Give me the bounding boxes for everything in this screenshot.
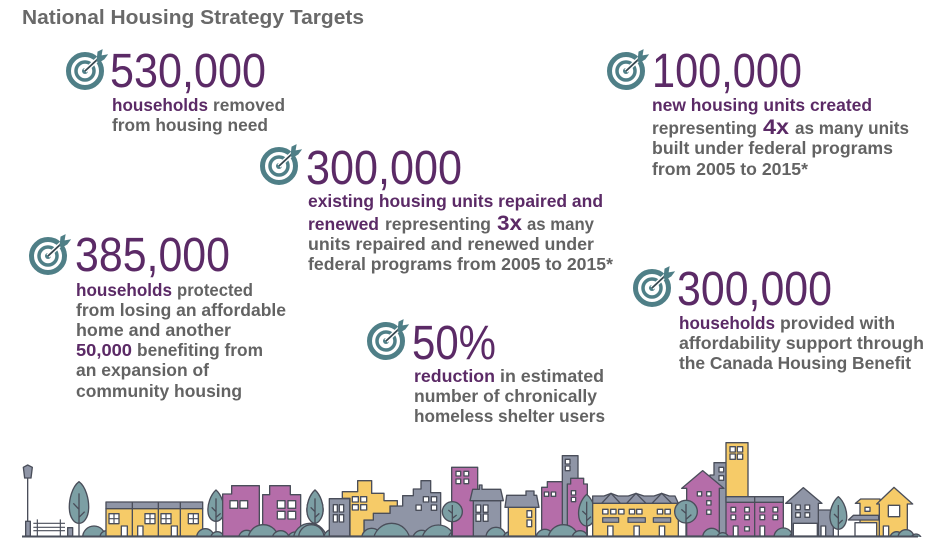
number: 100,000: 100,000 [652, 45, 802, 98]
round tree [675, 500, 697, 536]
description: protected households: benefiting from [137, 340, 263, 360]
ground line [22, 536, 918, 538]
row townhouses [593, 493, 678, 536]
number: 300,000: 300,000 [306, 142, 462, 195]
number: 300,000: 300,000 [677, 263, 832, 316]
description: affordability support: the Canada Housing Benefit [679, 353, 911, 373]
target: 100,000 new units [610, 45, 909, 179]
yellow house [505, 491, 539, 536]
description: affordability support: provided with [780, 313, 895, 333]
purple house [682, 471, 724, 536]
icon: target [610, 50, 648, 88]
icon: target [636, 267, 674, 304]
grey low building [329, 499, 350, 536]
bench [33, 519, 65, 536]
target: 300,000 households [636, 263, 924, 373]
description: repaired units: units repaired and renewed under [308, 234, 594, 254]
tree [307, 490, 323, 536]
description: protected households: 50,000 [76, 340, 132, 360]
yellow stepped building [342, 481, 397, 536]
description: protected households: community housing [76, 381, 242, 401]
row houses [106, 502, 203, 536]
bushes [83, 526, 113, 542]
description: affordability support: affordability support through [679, 333, 924, 353]
description: protected households: from losing an affordable [76, 300, 286, 320]
description: protected households: protected [177, 280, 253, 300]
icon: target [370, 320, 408, 358]
purple buildings [223, 486, 301, 536]
title: National Housing Strategy Targets [22, 7, 364, 29]
description: homelessness reduction: number of chronically [414, 386, 597, 406]
bushes [362, 523, 465, 542]
description: affordability support: households [679, 313, 775, 333]
description: repaired units: existing housing units repaired and [308, 191, 603, 211]
illustration: city skyline [0, 443, 928, 542]
bushes [486, 527, 517, 542]
bushes [197, 529, 224, 542]
description: protected households: an expansion of [76, 360, 209, 380]
yellow tower [726, 443, 748, 498]
yellow house [848, 487, 913, 536]
description: protected households: home and another [76, 320, 231, 340]
skyline middle section [299, 456, 595, 542]
description: homelessness reduction: in estimated [500, 366, 604, 386]
purple apartment block [726, 497, 783, 536]
description: 530,000: from housing need [112, 115, 268, 135]
tree [579, 494, 595, 536]
tree [208, 490, 224, 536]
number: 530,000: 530,000 [110, 45, 266, 98]
target: 385,000 households [32, 229, 286, 401]
number: 385,000: 385,000 [75, 229, 230, 282]
description: new units: built under federal programs [652, 138, 893, 158]
description: repaired units: renewed [308, 214, 379, 234]
target: 50% [370, 317, 605, 426]
description: new units [652, 95, 909, 179]
description: homelessness reduction: reduction [414, 366, 495, 386]
bushes [703, 528, 801, 542]
bushes [239, 523, 327, 542]
bushes [299, 525, 342, 542]
skyline left section [23, 465, 327, 542]
purple tower [452, 467, 478, 536]
description: new units: from 2005 to 2015* [652, 159, 808, 179]
description: 530,000 [112, 95, 285, 135]
skyline right section [593, 443, 921, 542]
grey stepped building [364, 481, 441, 536]
description: new units: 4x [763, 116, 789, 139]
description: protected households: households [76, 280, 172, 300]
grey house [786, 488, 833, 536]
grey house [470, 485, 503, 536]
bushes [890, 530, 921, 542]
icon: target [68, 50, 107, 88]
target: 300,000 repaired units [262, 142, 613, 274]
description: repaired units [308, 191, 613, 274]
description: new units: as many units [795, 118, 909, 138]
purple and grey towers [542, 456, 587, 536]
bushes [536, 525, 588, 542]
lamp post [23, 465, 32, 536]
icon: target [262, 145, 301, 182]
description: repaired units: as many [527, 214, 594, 234]
description: protected households [76, 280, 286, 401]
description: affordability support [679, 313, 924, 373]
tree [307, 490, 323, 536]
tree [69, 482, 89, 536]
description: 530,000: households [112, 95, 208, 115]
description: repaired units: 3x [497, 212, 522, 235]
grey tower behind [710, 463, 733, 536]
icon: target [32, 235, 70, 272]
description: homelessness reduction: homeless shelter users [414, 406, 605, 426]
description: repaired units: federal programs from 2005 to 2015* [308, 254, 613, 274]
target: 530,000 households [68, 45, 285, 135]
tree [830, 497, 847, 536]
description: new units: new housing units created [652, 95, 872, 115]
round tree [442, 502, 462, 536]
number: 50%: 50% [412, 317, 496, 370]
description: homelessness reduction [414, 366, 605, 426]
description: new units: representing [652, 118, 757, 138]
description: repaired units: representing [385, 214, 491, 234]
description: 530,000: removed [213, 95, 285, 115]
